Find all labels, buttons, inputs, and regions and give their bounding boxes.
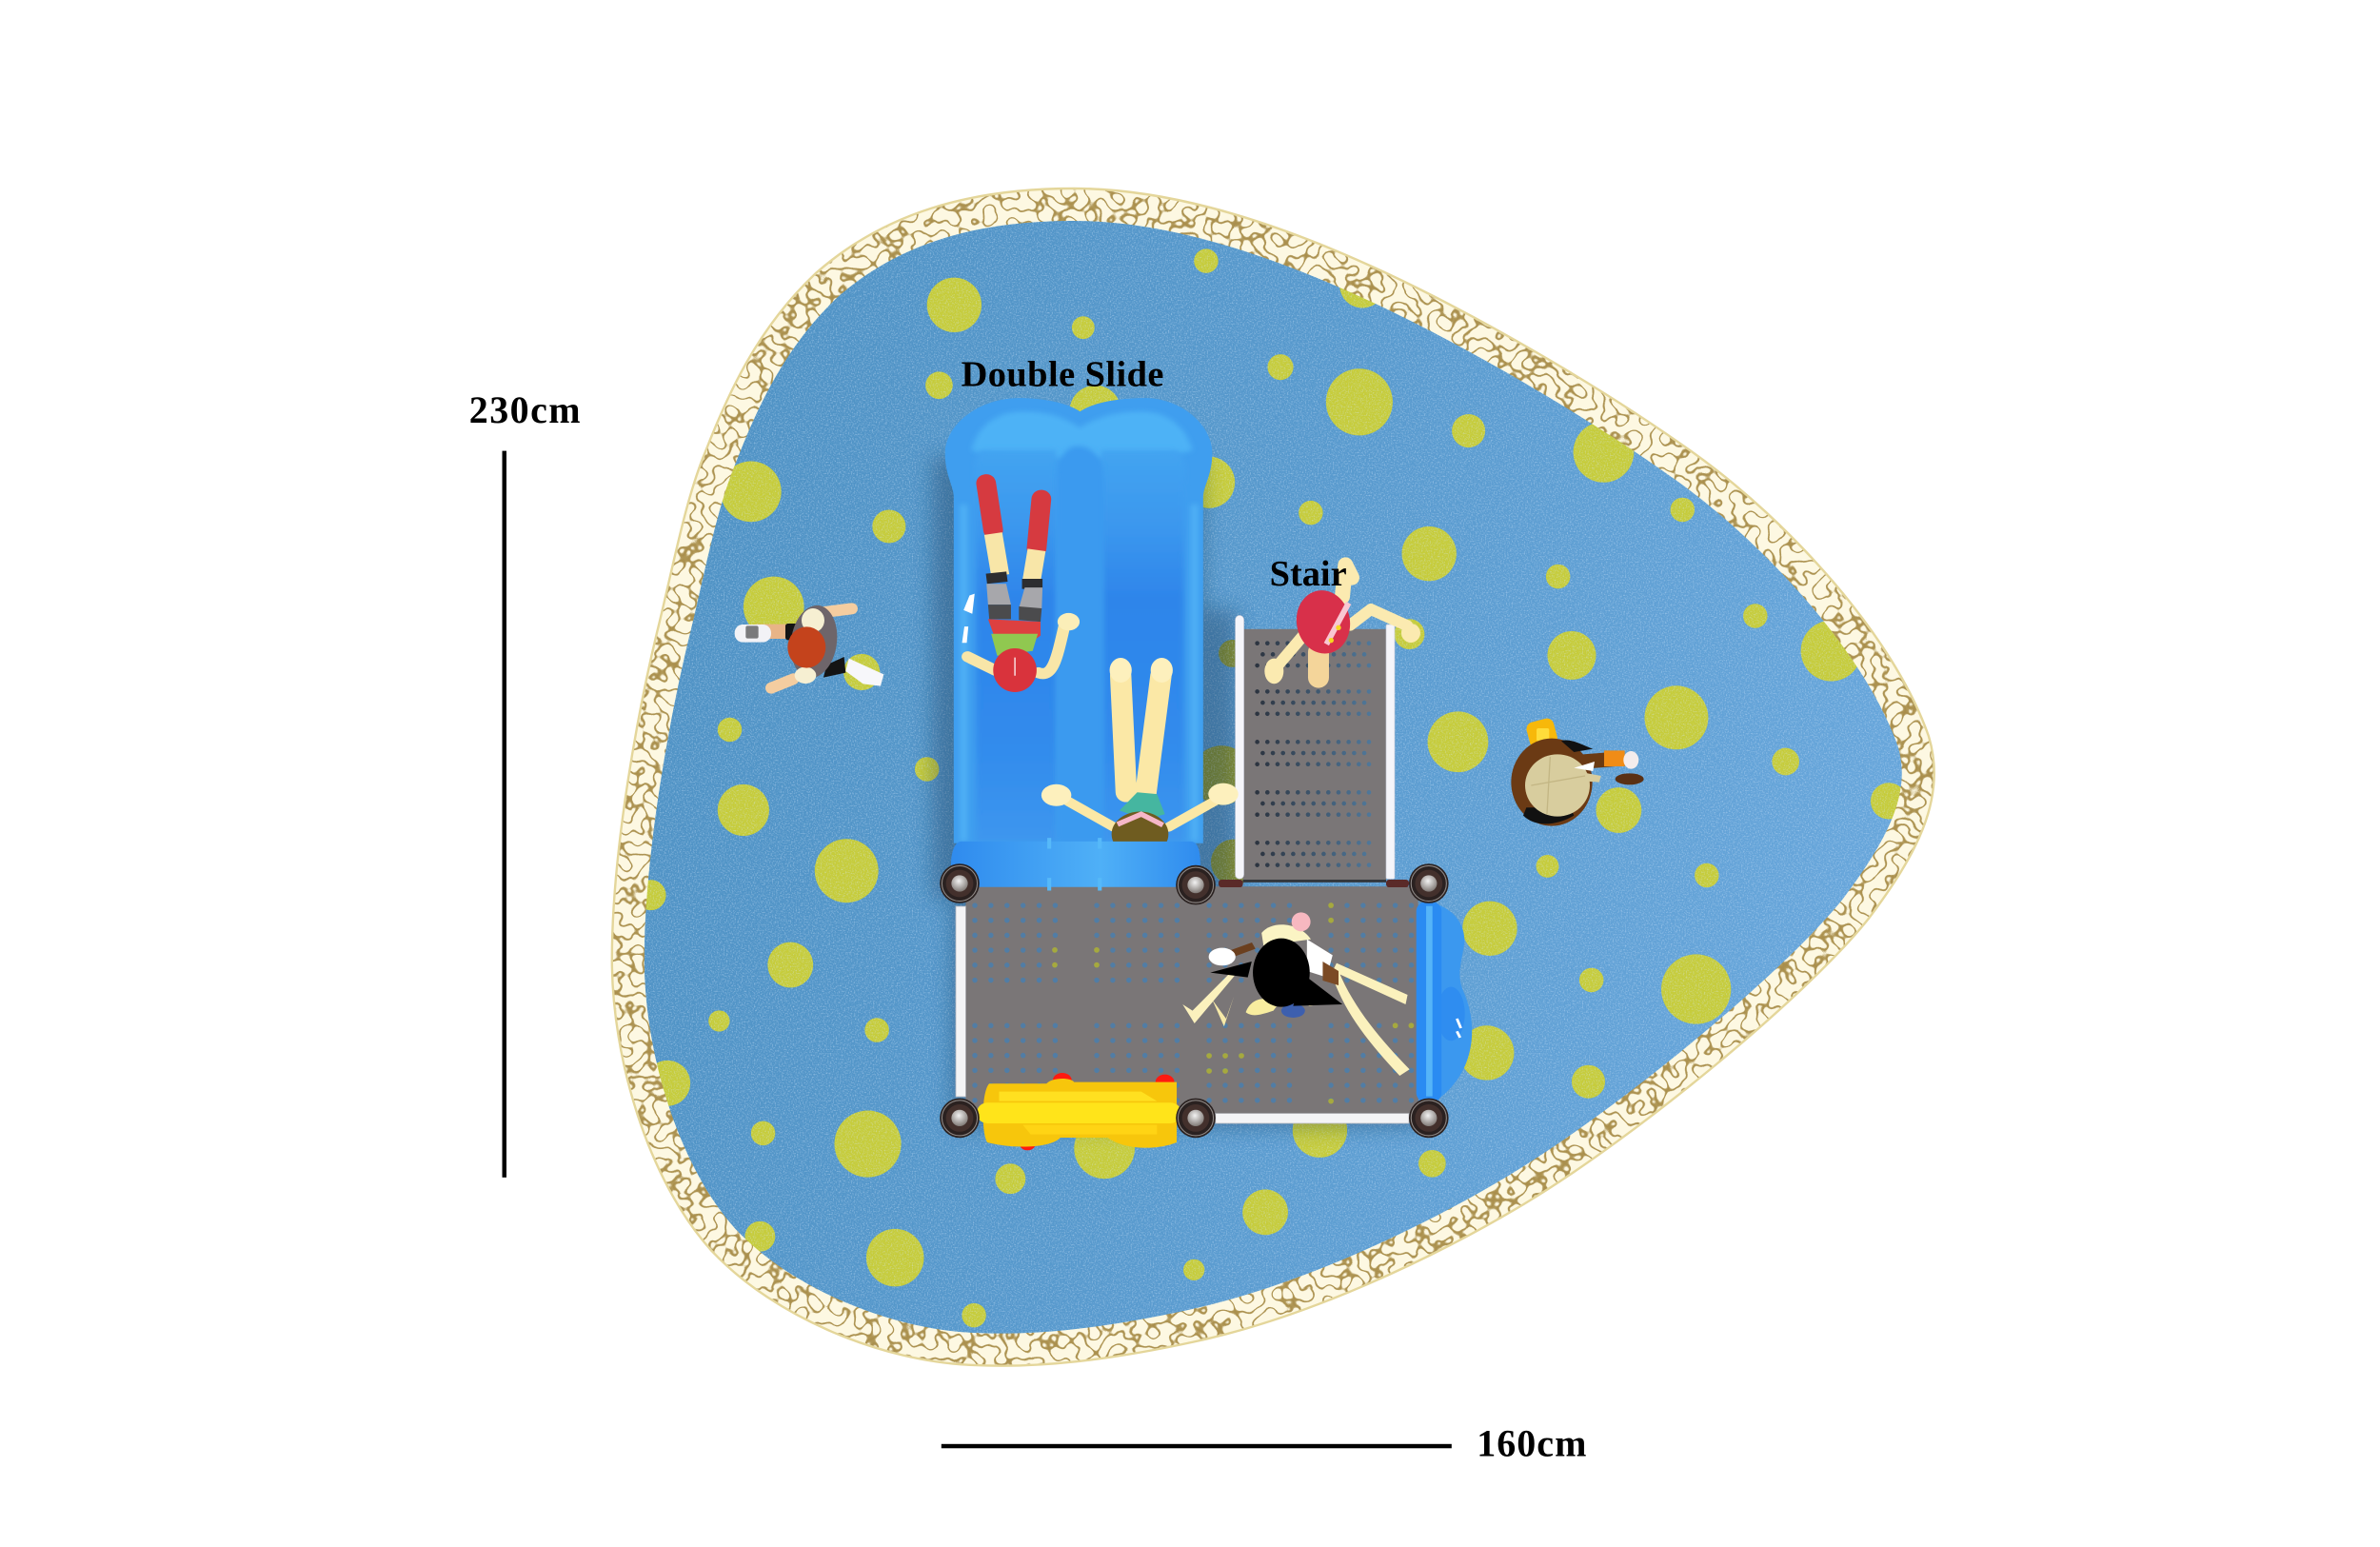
double slide — [945, 398, 1239, 891]
platform deck — [956, 886, 1418, 1123]
child sliding, red hair — [962, 484, 1080, 692]
child on floor right, tan hat — [1511, 717, 1644, 826]
blue rubber floor with yellow dots — [644, 221, 1902, 1334]
dimension: height 230cm — [469, 388, 581, 1178]
stair perforation rows — [1258, 644, 1370, 865]
platform perforation holes — [975, 902, 1414, 1104]
white rails — [956, 906, 1409, 1123]
child on stair, red hat — [1264, 565, 1420, 684]
child on floor left, orange hair — [735, 603, 883, 688]
dimension: width 160cm — [942, 1422, 1586, 1465]
label: double slide: Double Slide — [962, 355, 1163, 395]
child sliding, olive hair — [1041, 658, 1239, 857]
blue side climber — [1417, 902, 1472, 1102]
pebble border ring — [645, 221, 1902, 1334]
stair rails — [1236, 615, 1395, 879]
rail connectors — [1219, 880, 1409, 887]
label: stair: Stair — [1270, 554, 1347, 594]
child on platform, black hair — [1182, 912, 1410, 1076]
yellow climber — [978, 1073, 1180, 1150]
post connectors — [940, 863, 1449, 1138]
stair — [1219, 615, 1409, 887]
dimension: height 230cm: 230cm — [469, 388, 581, 431]
structure shadow — [932, 457, 1424, 1127]
slide exit lip — [951, 838, 1200, 891]
dimension: width 160cm: 160cm — [1477, 1422, 1586, 1465]
